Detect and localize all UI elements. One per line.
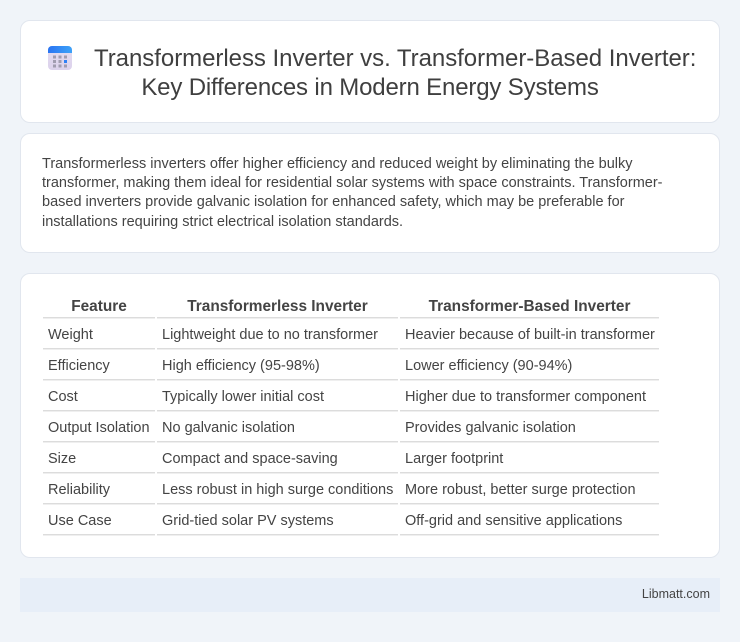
- text: Compact and space-saving: [162, 451, 338, 467]
- text: Less robust in high surge conditions: [162, 482, 393, 498]
- text: More robust, better surge protection: [405, 482, 636, 498]
- row: Output Isolation: Output Isolation: [48, 420, 150, 436]
- row: Reliability: Reliability: [48, 482, 110, 498]
- title line two: Key Differences in Modern Energy Systems: [141, 74, 599, 101]
- column header: Feature: Feature: [71, 298, 127, 315]
- title: Transformerless Inverter vs. Transformer-Based Inverter:: [94, 45, 696, 72]
- column header: Transformer-Based Inverter: Transformer-Based Inverter: [429, 298, 630, 315]
- row: Size: Size: [48, 451, 76, 467]
- icon: calendar grid: [48, 46, 72, 70]
- text: Lightweight due to no transformer: [162, 327, 378, 343]
- row: Use Case: Use Case: [48, 513, 112, 529]
- text: No galvanic isolation: [162, 420, 295, 436]
- text: Higher due to transformer component: [405, 389, 646, 405]
- text: Provides galvanic isolation: [405, 420, 576, 436]
- row: Efficiency: Efficiency: [48, 358, 110, 374]
- text: Heavier because of built-in transformer: [405, 327, 655, 343]
- summary text: based inverters provide galvanic isolation for enhanced safety, which may be preferable for: [42, 194, 624, 210]
- text: High efficiency (95-98%): [162, 358, 320, 374]
- text: Off-grid and sensitive applications: [405, 513, 622, 529]
- footer bar: [20, 578, 720, 612]
- summary text: transformer, making them ideal for residential solar systems with space constraints. Transformer-: [42, 175, 663, 191]
- footer text: Libmatt.com: [642, 587, 710, 601]
- row: Cost: Cost: [48, 389, 78, 405]
- panel: comparison table card: [20, 273, 720, 558]
- panel: title card: [20, 20, 720, 123]
- summary text: installations requiring strict electrical isolation standards.: [42, 214, 403, 230]
- summary text: [42, 156, 663, 230]
- text: Larger footprint: [405, 451, 503, 467]
- text: Lower efficiency (90-94%): [405, 358, 572, 374]
- text: Grid-tied solar PV systems: [162, 513, 334, 529]
- column header: Transformerless Inverter: Transformerless Inverter: [187, 298, 368, 315]
- row: Weight: Weight: [48, 327, 93, 343]
- text: Typically lower initial cost: [162, 389, 324, 405]
- summary text: Transformerless inverters offer higher efficiency and reduced weight by eliminating the bulky: [42, 156, 632, 172]
- comparison table: [43, 298, 659, 536]
- panel: summary card: [20, 133, 720, 253]
